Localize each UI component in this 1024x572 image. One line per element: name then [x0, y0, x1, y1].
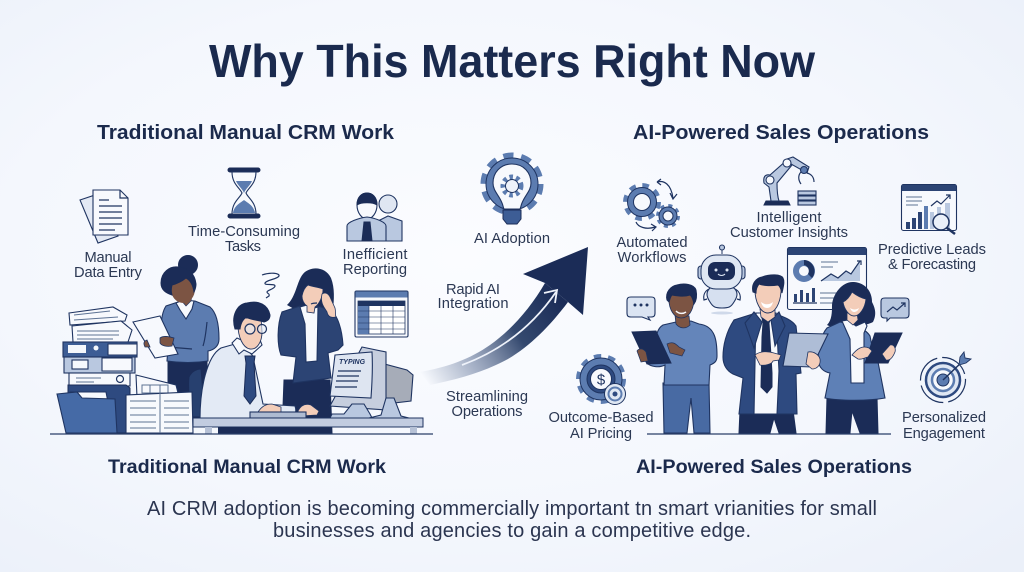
- icon: hourglass: [228, 168, 260, 218]
- label: streamlining operations: [446, 389, 528, 420]
- label: personalized engagement: Personalized: [902, 410, 986, 426]
- heading: traditional manual CRM work: Traditional Manual CRM Work: [97, 121, 395, 144]
- text block: conclusion: [147, 498, 877, 542]
- icon: stress scribble: [262, 273, 279, 298]
- label: outcome-based AI pricing: [548, 410, 654, 442]
- icon: predictive chart: [902, 184, 956, 234]
- icon: AI adoption gear bulb: [484, 156, 540, 224]
- label: inefficient reporting: Reporting: [343, 262, 407, 278]
- label: streamlining operations: Operations: [452, 404, 522, 420]
- text block: conclusion: AI CRM adoption is becoming commercially important tn smart vrianities for small: [147, 498, 877, 520]
- label: rapid AI integration: Rapid AI: [446, 282, 500, 298]
- icon: outcome pricing gear: $: [597, 372, 606, 388]
- label: predictive leads and forecasting: [878, 242, 986, 273]
- person: man in suit with tablet: [723, 275, 828, 433]
- arrow: growth: [420, 247, 588, 385]
- label: rapid AI integration: Integration: [438, 296, 508, 312]
- floor line: [50, 433, 433, 435]
- label: inefficient reporting: Inefficient: [342, 247, 408, 263]
- floor line: [647, 433, 891, 435]
- person: man typing at computer: [189, 302, 319, 419]
- label: intelligent customer insights: Customer Insights: [730, 225, 848, 241]
- label: intelligent customer insights: [730, 210, 848, 241]
- label: predictive leads and forecasting: & Forecasting: [888, 257, 976, 273]
- label: predictive leads and forecasting: Predictive Leads: [878, 242, 986, 258]
- label: time-consuming tasks: Time-Consuming: [188, 224, 300, 240]
- panel: manual CRM scene: [50, 168, 433, 434]
- heading: AI-powered sales operations: AI-Powered Sales Operations: [633, 121, 929, 144]
- icon: target: [920, 352, 971, 402]
- label: AI adoption: AI Adoption: [474, 231, 550, 247]
- label: manual data entry: Data Entry: [74, 265, 143, 281]
- label: intelligent customer insights: Intelligent: [756, 210, 822, 226]
- label: automated workflows: [616, 235, 688, 266]
- subheading: traditional manual CRM work: Traditional Manual CRM Work: [108, 457, 386, 478]
- person: man with tablet: [632, 284, 717, 433]
- label: outcome-based AI pricing: Outcome-Based: [548, 410, 654, 426]
- icon: robot: [698, 245, 745, 314]
- person: woman reading paper: [133, 256, 219, 394]
- icon: spreadsheet: [355, 291, 408, 337]
- label: automated workflows: Workflows: [618, 250, 686, 266]
- label: manual data entry: Manual: [84, 250, 132, 266]
- label: outcome-based AI pricing: AI Pricing: [570, 426, 632, 442]
- stack of papers and binders: [57, 307, 193, 433]
- person: woman with headache: [278, 268, 343, 433]
- center: AI adoption arrow group: [420, 156, 588, 420]
- icon: outcome pricing gear: [579, 357, 626, 404]
- icon: gears: [626, 179, 678, 231]
- label: time-consuming tasks: [188, 224, 300, 255]
- icon: robot arm: [764, 157, 816, 205]
- label: inefficient reporting: [342, 247, 408, 278]
- computer monitor: [330, 347, 413, 418]
- panel: AI-powered operations scene: [548, 157, 986, 442]
- label: rapid AI integration: [438, 282, 508, 312]
- icon: analytics dashboard: [788, 248, 866, 310]
- icon: people: [347, 193, 402, 241]
- label: manual data entry: [74, 250, 143, 281]
- text block: conclusion: businesses and agencies to gain a competitive edge.: [273, 520, 751, 542]
- title: Why This Matters Right Now: [209, 35, 815, 87]
- keyboard and desk: [193, 412, 423, 434]
- icon: documents: [80, 190, 128, 243]
- label: personalized engagement: Engagement: [903, 426, 985, 442]
- icon: trend bubble: [881, 298, 909, 321]
- label: personalized engagement: [902, 410, 986, 442]
- subheading: AI-powered sales operations: AI-Powered Sales Operations: [636, 457, 912, 478]
- label: streamlining operations: Streamlining: [446, 389, 528, 405]
- computer monitor: TYPING: [339, 359, 366, 366]
- icon: chat bubble: [627, 297, 655, 320]
- label: time-consuming tasks: Tasks: [225, 239, 261, 255]
- label: automated workflows: Automated: [616, 235, 688, 251]
- person: woman with tablet: [818, 282, 902, 433]
